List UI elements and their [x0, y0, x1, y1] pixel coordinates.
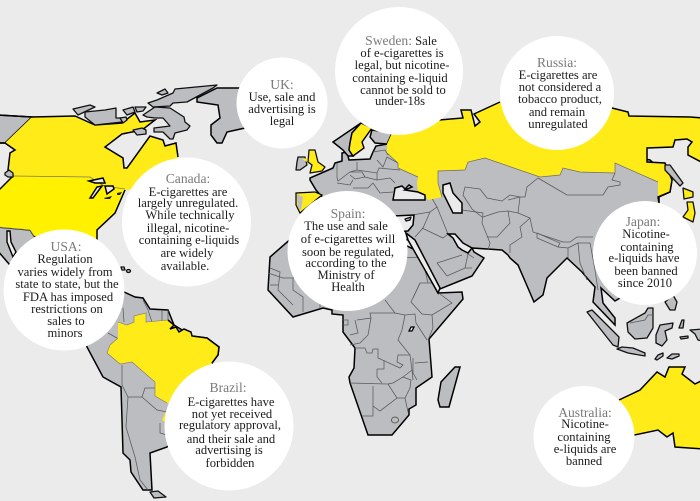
callout: Japan: Nicotine-	[622, 227, 670, 241]
land: Iberia	[296, 192, 322, 213]
callout: Brazil: and their sale and	[187, 432, 276, 446]
callout: Brazil: regulatory approval,	[179, 418, 281, 432]
land: Eurasia	[310, 130, 672, 325]
callout: Spain: according to the	[305, 256, 387, 270]
callout: USA: Regulation	[37, 252, 93, 266]
land: South America	[80, 292, 219, 498]
callout: Spain: Health	[331, 280, 365, 294]
callout: Russia: not considered a	[519, 80, 602, 94]
line: US-Canada border	[13, 176, 125, 189]
land: Madagascar	[438, 367, 460, 407]
callout: UK: legal	[270, 114, 295, 128]
callout: Australia	[534, 386, 634, 487]
callout: Spain: soon be regulated,	[302, 245, 394, 259]
callout: Canada: containing e-liquids	[139, 233, 239, 247]
coast: North America	[0, 113, 178, 240]
callout: Spain: Spain:	[331, 206, 365, 221]
callout: Australia: banned	[566, 454, 603, 468]
callout: Brazil: advertising is	[195, 443, 263, 457]
callout: Japan: been banned	[614, 264, 678, 278]
land: Canada	[5, 113, 180, 190]
land: Australia	[619, 367, 700, 449]
land: United Kingdom	[308, 150, 325, 173]
sea: eastern Mediterranean	[393, 215, 414, 232]
callout: USA: restrictions on	[31, 302, 104, 316]
callout: Russia: and remain	[529, 105, 586, 119]
land: Great Lakes	[89, 178, 122, 199]
callout: Sweden	[335, 7, 463, 135]
sea: Red Sea	[406, 233, 440, 293]
callout: Sweden: containing e-liquid	[352, 71, 448, 85]
callout: Australia: containing	[557, 430, 611, 444]
callout: Canada	[122, 158, 251, 286]
callout: Russia: E-cigarettes are	[519, 68, 598, 82]
callout: Japan: since 2010	[618, 276, 672, 290]
callout: Canada: E-cigarettes are	[149, 185, 228, 199]
callout: Sweden: legal, but nicotine-	[355, 58, 449, 72]
callout: UK: UK:	[270, 77, 294, 92]
callout: Sweden: of e-cigarettes is	[360, 46, 444, 60]
land: Arctic islands	[5, 85, 217, 177]
callout: Canada: are widely	[161, 246, 214, 260]
callout: UK: advertising is	[248, 102, 316, 116]
callout: Spain: of e-cigarettes will	[301, 232, 396, 246]
land: Russia	[387, 90, 700, 203]
callout: Japan: containing	[620, 240, 674, 254]
callout: Canada: available.	[161, 259, 209, 273]
callout: Spain	[288, 191, 408, 311]
callout: Brazil: Brazil:	[210, 380, 246, 395]
land: Mexico and Central America	[0, 227, 124, 345]
callout: USA: minors	[48, 326, 83, 340]
callout: USA: USA:	[51, 239, 81, 254]
land: Alaska	[0, 115, 32, 143]
callout: Brazil	[164, 362, 294, 490]
callout: USA	[4, 230, 124, 350]
land: Caribbean islands	[121, 267, 130, 272]
callout: Japan: Japan:	[626, 214, 660, 229]
land: Sweden	[349, 123, 372, 156]
sea: Caspian Sea	[443, 183, 462, 213]
land: Southeast Asia islands	[587, 295, 700, 360]
land: United States	[0, 176, 125, 250]
callout: Brazil: not yet received	[192, 407, 273, 421]
sea: Persian Gulf	[448, 234, 472, 253]
callout: Sweden: under-18s	[375, 94, 425, 108]
callout: Spain: The use and sale	[304, 219, 388, 233]
land: Finland	[370, 130, 392, 144]
callout: Spain: Ministry of	[317, 268, 375, 282]
land: Sakhalin	[665, 165, 683, 186]
callout: Canada: largely unregulated.	[138, 196, 238, 210]
callout: USA: varies widely from	[17, 265, 113, 279]
callout: UK	[236, 58, 328, 148]
land: Japan	[683, 188, 695, 222]
callout: Brazil: E-cigarettes have	[187, 395, 275, 409]
callout: USA: sales to	[47, 314, 85, 328]
callout: Sweden: cannot be sold to	[360, 83, 446, 97]
callout: UK: Use, sale and	[249, 90, 316, 104]
land: Brazil	[107, 313, 219, 425]
land: Greenland	[197, 88, 250, 143]
callout: Russia: Russia:	[537, 55, 577, 70]
callout: Russia: unregulated	[528, 117, 588, 131]
callout: Canada: illegal, nicotine-	[147, 221, 229, 235]
callout: USA: state to state, but the	[15, 277, 119, 291]
line: Mexico-US border	[0, 227, 34, 236]
callout: Brazil: forbidden	[206, 456, 255, 470]
sea: Black Sea	[393, 185, 425, 200]
land: Africa	[268, 220, 463, 435]
callout: Japan: e-liquids have	[608, 251, 680, 265]
callout: Russia	[500, 36, 614, 150]
callout: Japan	[593, 201, 697, 305]
callout: Australia: Nicotine-	[561, 417, 609, 431]
land: Norway	[333, 123, 361, 156]
callout: Sweden: Sweden: Sale	[365, 33, 437, 48]
callout: USA: FDA has imposed	[23, 290, 114, 304]
land: Ireland	[296, 157, 307, 170]
callout: Canada: While technically	[145, 208, 235, 222]
callout: Australia: Australia:	[558, 405, 612, 420]
callout: Canada: Canada:	[166, 171, 210, 186]
callout: Russia: tobacco product,	[518, 92, 602, 106]
callout: Australia: e-liquids are	[554, 442, 617, 456]
